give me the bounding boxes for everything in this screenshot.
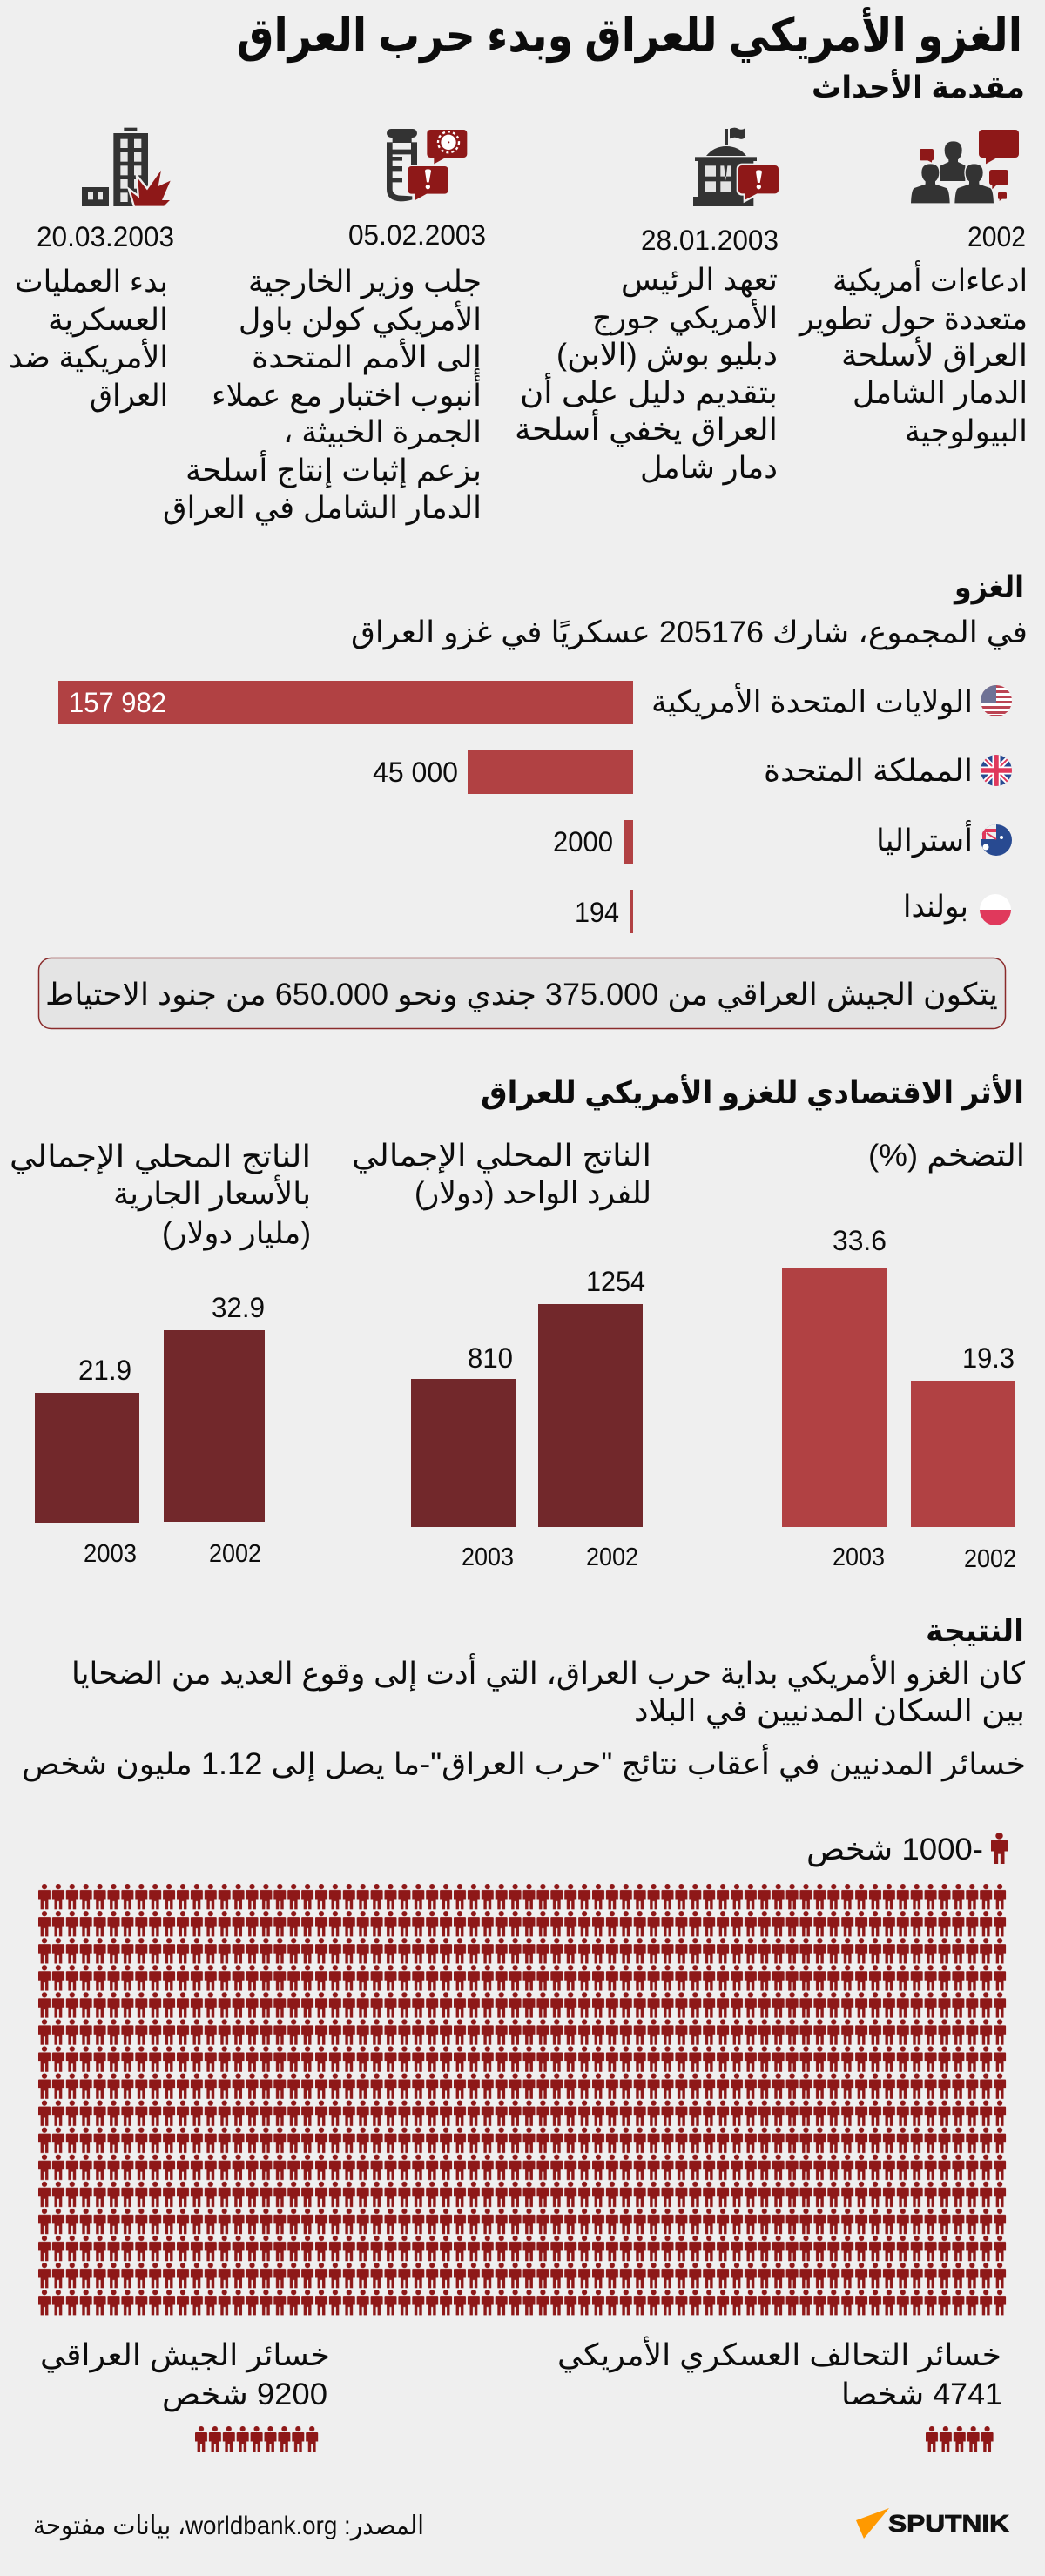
text: 2002 event: متعددة حول تطوير <box>798 302 1028 337</box>
logo: Sputnik: SPUTNIK <box>888 2510 1009 2537</box>
row: United States <box>58 681 1012 724</box>
chart title: GDP at current prices: بالأسعار الجارية <box>113 1174 311 1212</box>
value: inflation 2002: 19.3 <box>962 1342 1015 1374</box>
text: 2002 event <box>798 260 1028 449</box>
text: 2002 event: الدمار الشامل <box>853 376 1028 411</box>
text: 2002 event: العراق لأسلحة <box>841 336 1028 373</box>
bar: Poland <box>630 890 633 933</box>
text: 05.02.2003 event: الدمار الشامل في العراق <box>163 491 482 526</box>
pictogram: Iraqi army losses <box>195 2426 320 2452</box>
value: GDP 2002: 32.9 <box>212 1292 265 1323</box>
bar: inflation 2003 <box>782 1268 887 1527</box>
value: Poland: 194 <box>575 897 619 928</box>
chart title: GDP at current prices: (مليار دولار) <box>162 1216 311 1251</box>
text: 28.01.2003 event: بتقديم دليل على أن <box>520 373 778 411</box>
bar: GDP 2003 <box>35 1393 139 1523</box>
text: 05.02.2003 event: بزعم إثبات إنتاج أسلحة <box>185 450 482 488</box>
chart title: GDP per capita: للفرد الواحد (دولار) <box>415 1176 651 1211</box>
heading: invasion: الغزو <box>953 570 1024 605</box>
date: 05.02.2003: 05.02.2003 <box>348 219 486 251</box>
icon: test tube with alerts <box>387 129 467 201</box>
callout: Iraqi army size: يتكون الجيش العراقي من 375.000 جندي ونحو 650.000 من جنود الاحتياط <box>45 978 998 1012</box>
value: GDP 2003: 21.9 <box>78 1355 131 1386</box>
text: 05.02.2003 event: إلى الأمم المتحدة <box>252 338 482 375</box>
text: result description <box>71 1653 1025 1729</box>
year: 2003: 2003 <box>84 1540 137 1568</box>
text: 20.03.2003 event: الأمريكية ضد <box>9 338 168 375</box>
year: 2002: 2002 <box>209 1540 261 1568</box>
icon: US flag <box>981 685 1012 716</box>
subtitle: background of events: مقدمة الأحداث <box>812 68 1025 104</box>
label: Australia: أستراليا <box>876 820 973 858</box>
chart title: GDP per capita: الناتج المحلي الإجمالي <box>352 1139 651 1174</box>
bar: inflation 2002 <box>911 1381 1015 1527</box>
text: 28.01.2003 event: دمار شامل <box>640 451 778 486</box>
chart title: GDP at current prices <box>10 1140 311 1251</box>
bar chart: troops by country <box>58 681 1012 933</box>
text: 28.01.2003 event: الأمريكي جورج <box>592 299 778 336</box>
panel: timeline 20.03.2003 <box>9 128 174 414</box>
value: GDP per capita 2002: 1254 <box>586 1266 645 1297</box>
text: 05.02.2003 event: أنبوب اختبار مع عملاء <box>212 375 482 414</box>
text: 28.01.2003 event: العراق يخفي أسلحة <box>515 409 778 447</box>
text: civilian losses: خسائر المدنيين في أعقاب نتائج "حرب العراق"-ما يصل إلى 1.12 مليون شخص <box>22 1744 1026 1782</box>
text: 2002 event: البيولوجية <box>905 414 1028 449</box>
text: Iraqi army losses: خسائر الجيش العراقي <box>40 2338 330 2373</box>
icon: UK flag <box>981 755 1012 786</box>
bar: GDP 2002 <box>164 1330 265 1522</box>
icon: person <box>991 1833 1008 1864</box>
text: 20.03.2003 event: بدء العمليات <box>15 265 168 299</box>
row: Poland <box>575 890 1011 933</box>
icon: people with speech bubbles <box>911 130 1019 203</box>
year: 2002: 2002 <box>964 1545 1016 1573</box>
date: 2002: 2002 <box>967 221 1026 252</box>
chart: inflation <box>782 1139 1025 1573</box>
legend text: -1000 شخص <box>806 1833 983 1867</box>
text: invasion total: في المجموع، شارك 205176 عسكريًا في غزو العراق <box>351 615 1028 650</box>
text: 20.03.2003 event <box>9 265 168 414</box>
text: 20.03.2003 event: العراق <box>90 379 168 414</box>
text: 2002 event: ادعاءات أمريكية <box>833 260 1028 299</box>
value: GDP per capita 2003: 810 <box>468 1342 513 1374</box>
date: 20.03.2003: 20.03.2003 <box>37 221 174 252</box>
heading: result: النتيجة <box>926 1614 1024 1648</box>
label: United States: الولايات المتحدة الأمريكية <box>651 683 973 720</box>
bar: United Kingdom <box>468 750 633 794</box>
text: 28.01.2003 event: دبليو بوش (الابن) <box>556 338 778 373</box>
chart: GDP per capita <box>352 1139 651 1571</box>
text: Iraqi army losses: 9200 شخص <box>162 2378 327 2412</box>
pictogram: civilian losses, 1120 figures <box>38 1884 1008 2316</box>
text: coalition losses <box>557 2336 1002 2411</box>
year: 2003: 2003 <box>462 1544 514 1571</box>
bar: United States <box>58 681 633 724</box>
text: coalition losses: 4741 شخصا <box>841 2378 1002 2411</box>
pictogram: coalition losses <box>926 2426 994 2452</box>
label: United Kingdom: المملكة المتحدة <box>764 754 973 788</box>
year: 2002: 2002 <box>586 1544 638 1571</box>
bar: GDP per capita 2003 <box>411 1379 516 1527</box>
value: United States: 157 982 <box>69 687 166 718</box>
panel: timeline 05.02.2003 <box>163 129 486 526</box>
source: المصدر: worldbank.org، بيانات مفتوحة <box>33 2512 424 2540</box>
chart title: GDP at current prices: الناتج المحلي الإجمالي <box>10 1140 311 1174</box>
text: 28.01.2003 event: تعهد الرئيس <box>621 263 778 298</box>
text: 20.03.2003 event: العسكرية <box>48 303 168 338</box>
panel: timeline 28.01.2003 <box>515 128 779 486</box>
logo: Sputnik <box>856 2508 1009 2539</box>
text: 05.02.2003 event: الأمريكي كولن باول <box>239 300 482 338</box>
text: coalition losses: خسائر التحالف العسكري الأمريكي <box>557 2336 1001 2373</box>
value: Australia: 2000 <box>553 826 613 858</box>
icon: government building with alert <box>693 128 779 206</box>
label: Poland: بولندا <box>903 890 968 925</box>
callout: Iraqi army size <box>38 958 1005 1029</box>
row: United Kingdom <box>373 750 1012 794</box>
bar: GDP per capita 2002 <box>538 1304 643 1527</box>
text: result description: بين السكان المدنيين في البلاد <box>634 1694 1025 1729</box>
panel: timeline 2002 <box>798 130 1028 449</box>
value: inflation 2003: 33.6 <box>833 1225 887 1256</box>
text: 05.02.2003 event <box>163 265 482 526</box>
bar: Australia <box>624 820 633 864</box>
row: Australia <box>553 820 1012 864</box>
date: 28.01.2003: 28.01.2003 <box>641 225 779 256</box>
heading: economic impact: الأثر الاقتصادي للغزو الأمريكي للعراق <box>481 1073 1024 1111</box>
text: Iraqi army losses <box>40 2338 330 2412</box>
chart: GDP at current prices <box>10 1140 311 1568</box>
value: United Kingdom: 45 000 <box>373 757 458 788</box>
chart title: inflation: التضخم (%) <box>868 1139 1025 1174</box>
text: result description: كان الغزو الأمريكي بداية حرب العراق، التي أدت إلى وقوع العديد من الضحايا <box>71 1653 1025 1692</box>
icon: Australia flag <box>981 824 1012 856</box>
text: 28.01.2003 event <box>515 263 778 486</box>
icon: Poland flag <box>980 894 1011 925</box>
legend: one figure equals 1000 people <box>806 1833 1008 1867</box>
text: 05.02.2003 event: الجمرة الخبيثة ، <box>283 415 482 450</box>
year: 2003: 2003 <box>833 1544 885 1571</box>
text: 05.02.2003 event: جلب وزير الخارجية <box>248 265 482 299</box>
chart title: GDP per capita <box>352 1139 651 1211</box>
icon: building with explosion <box>82 128 171 206</box>
